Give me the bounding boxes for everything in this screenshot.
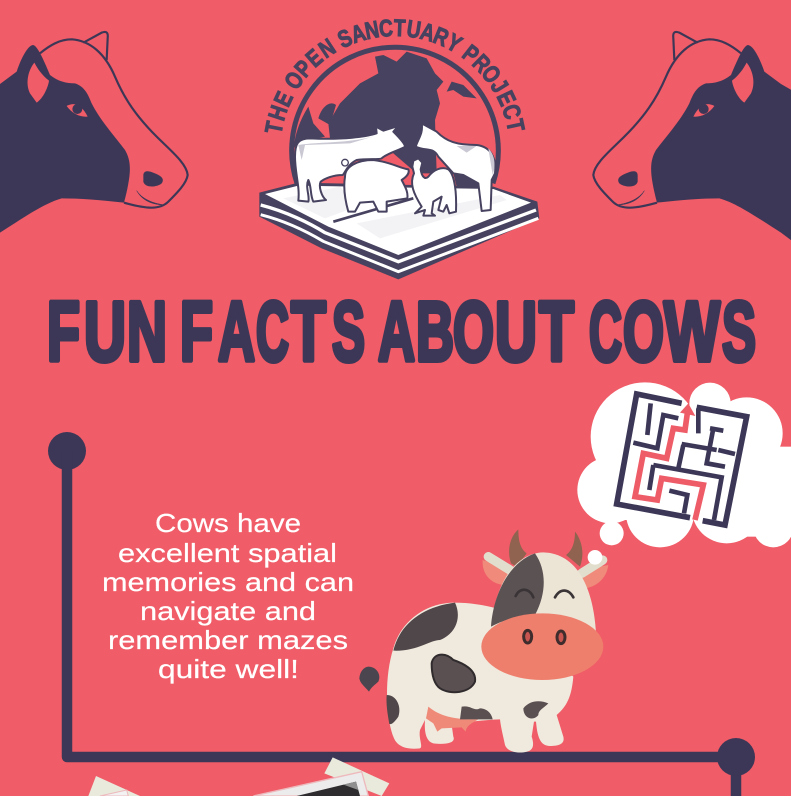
title: A xyxy=(378,284,415,378)
thought bubble xyxy=(577,382,791,565)
logo wordmark: S xyxy=(333,23,356,54)
logo wordmark: R xyxy=(430,21,453,52)
logo wordmark: E xyxy=(268,87,298,111)
maze solution arrow xyxy=(635,403,703,520)
logo wordmark: T xyxy=(393,14,407,42)
fact text: navigate and xyxy=(140,596,316,626)
title: C xyxy=(256,284,289,378)
logo pig xyxy=(342,159,409,212)
title: S xyxy=(722,284,756,378)
logo wordmark: A xyxy=(417,17,438,47)
logo rooster xyxy=(412,158,456,216)
title: S xyxy=(332,284,365,378)
maze walls xyxy=(617,394,747,525)
fact text: excellent spatial xyxy=(118,538,337,568)
logo wordmark xyxy=(259,14,530,136)
fact text: quite well! xyxy=(158,654,299,684)
logo wordmark: O xyxy=(278,66,310,94)
polaroid photos at bottom xyxy=(88,757,389,796)
fact text: remember mazes xyxy=(108,625,348,655)
logo wordmark: P xyxy=(457,39,484,69)
title: T xyxy=(539,284,574,378)
logo wordmark: H xyxy=(262,102,293,124)
logo wordmark: C xyxy=(497,101,527,123)
icon: left cow head xyxy=(0,32,188,240)
title: U xyxy=(84,284,126,378)
cow udder xyxy=(426,707,478,732)
title: W xyxy=(664,284,720,378)
title: F xyxy=(180,284,213,378)
fact text: Cows have xyxy=(155,508,301,538)
icon: right cow head xyxy=(593,32,791,243)
logo wordmark: O xyxy=(476,60,507,89)
logo wordmark: Y xyxy=(442,28,467,58)
cow body xyxy=(387,603,573,753)
logo wordmark: A xyxy=(347,18,369,49)
title xyxy=(47,284,756,378)
cartoon cow xyxy=(359,529,608,753)
cow head xyxy=(481,552,603,680)
cow spots xyxy=(386,603,548,724)
logo wordmark: P xyxy=(289,55,318,83)
logo globe xyxy=(292,47,498,187)
right photo corner xyxy=(253,757,389,796)
title: O xyxy=(623,284,664,378)
logo cow xyxy=(295,126,405,202)
logo wordmark: T xyxy=(259,118,289,136)
title: N xyxy=(127,284,167,378)
logo: The Open Sanctuary Project xyxy=(259,14,539,279)
title: A xyxy=(218,284,255,378)
cow horns xyxy=(509,529,582,567)
logo wordmark: R xyxy=(467,49,497,78)
fact text xyxy=(102,508,354,684)
title: O xyxy=(453,284,494,378)
title: C xyxy=(589,284,622,378)
title: F xyxy=(47,284,80,378)
logo wordmark: N xyxy=(363,15,381,45)
thought bubble with maze xyxy=(577,382,791,565)
logo wordmark: T xyxy=(501,117,530,135)
logo horse xyxy=(416,123,495,211)
logo wordmark: C xyxy=(378,14,394,42)
fact text: memories and can xyxy=(102,567,354,597)
logo wordmark: N xyxy=(314,33,340,64)
cow ears xyxy=(483,557,608,588)
left photo corner xyxy=(88,776,140,796)
title: B xyxy=(416,284,454,378)
logo open book xyxy=(259,183,539,279)
logo wordmark: J xyxy=(485,74,514,98)
timeline connector xyxy=(48,432,755,796)
logo wordmark: E xyxy=(300,43,328,73)
title: T xyxy=(291,284,326,378)
cow tail xyxy=(359,667,379,692)
logo wordmark: U xyxy=(405,14,423,44)
title: U xyxy=(495,284,537,378)
logo wordmark: E xyxy=(491,87,522,110)
